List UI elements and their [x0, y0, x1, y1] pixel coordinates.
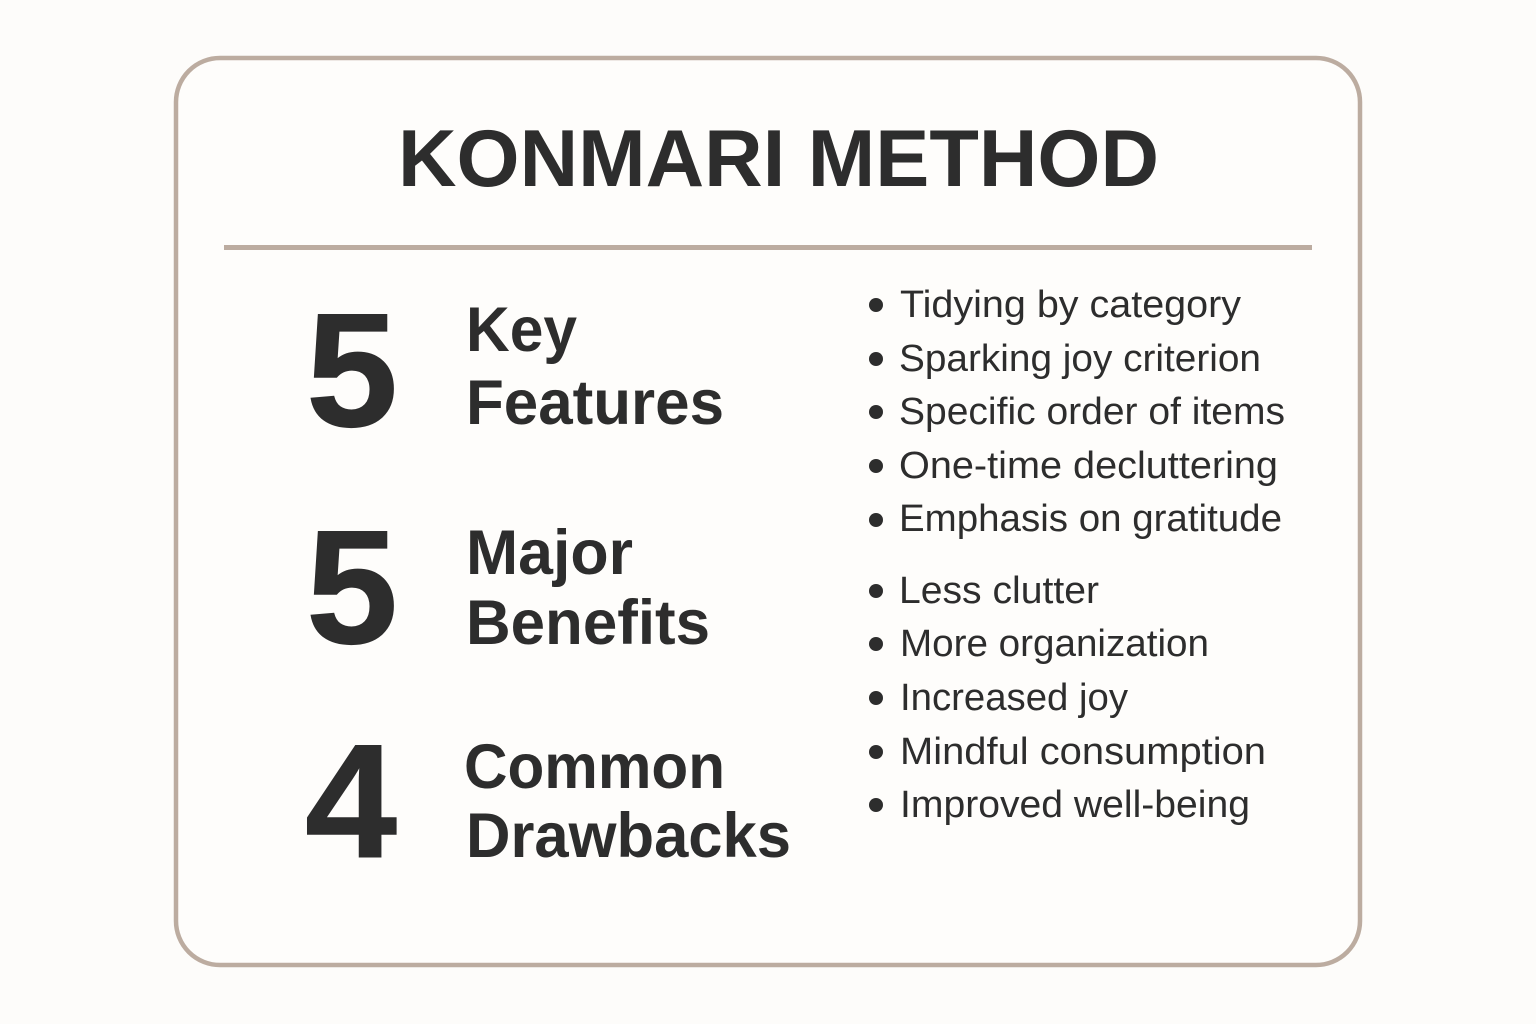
heading: key features: Key — [466, 295, 577, 365]
heading: major benefits — [466, 518, 710, 658]
heading: common drawbacks: Common — [464, 732, 725, 802]
heading: major benefits: Major — [466, 518, 633, 588]
stat: 5 key features — [306, 280, 724, 461]
list: major benefits: Mindful consumption — [900, 731, 1266, 773]
list: key features: Tidying by category — [900, 284, 1241, 326]
list: major benefits: Less clutter — [899, 570, 1099, 612]
heading: key features — [466, 295, 724, 438]
list: major benefits — [869, 570, 1266, 826]
list: major benefits: More organization — [900, 623, 1209, 665]
list: key features: Specific order of items — [899, 391, 1285, 433]
number: 4: 4 — [305, 711, 397, 892]
stat: 4 common drawbacks — [305, 711, 791, 892]
number: 5: 5 — [306, 280, 398, 461]
heading: common drawbacks: Drawbacks — [466, 801, 791, 871]
number: 5: 5 — [306, 497, 398, 678]
list: major benefits: Increased joy — [900, 677, 1128, 719]
title: KONMARI METHOD — [398, 114, 1159, 204]
list: key features — [869, 284, 1285, 540]
panel: main card — [176, 58, 1360, 965]
heading: major benefits: Benefits — [466, 588, 710, 658]
list: key features: One-time decluttering — [899, 445, 1278, 487]
heading: key features: Features — [466, 368, 724, 438]
list: major benefits: Improved well-being — [900, 784, 1250, 826]
stat: 5 major benefits — [306, 497, 710, 678]
list: key features: Emphasis on gratitude — [899, 498, 1282, 540]
list: key features: Sparking joy criterion — [899, 338, 1261, 380]
heading: common drawbacks — [464, 732, 791, 871]
